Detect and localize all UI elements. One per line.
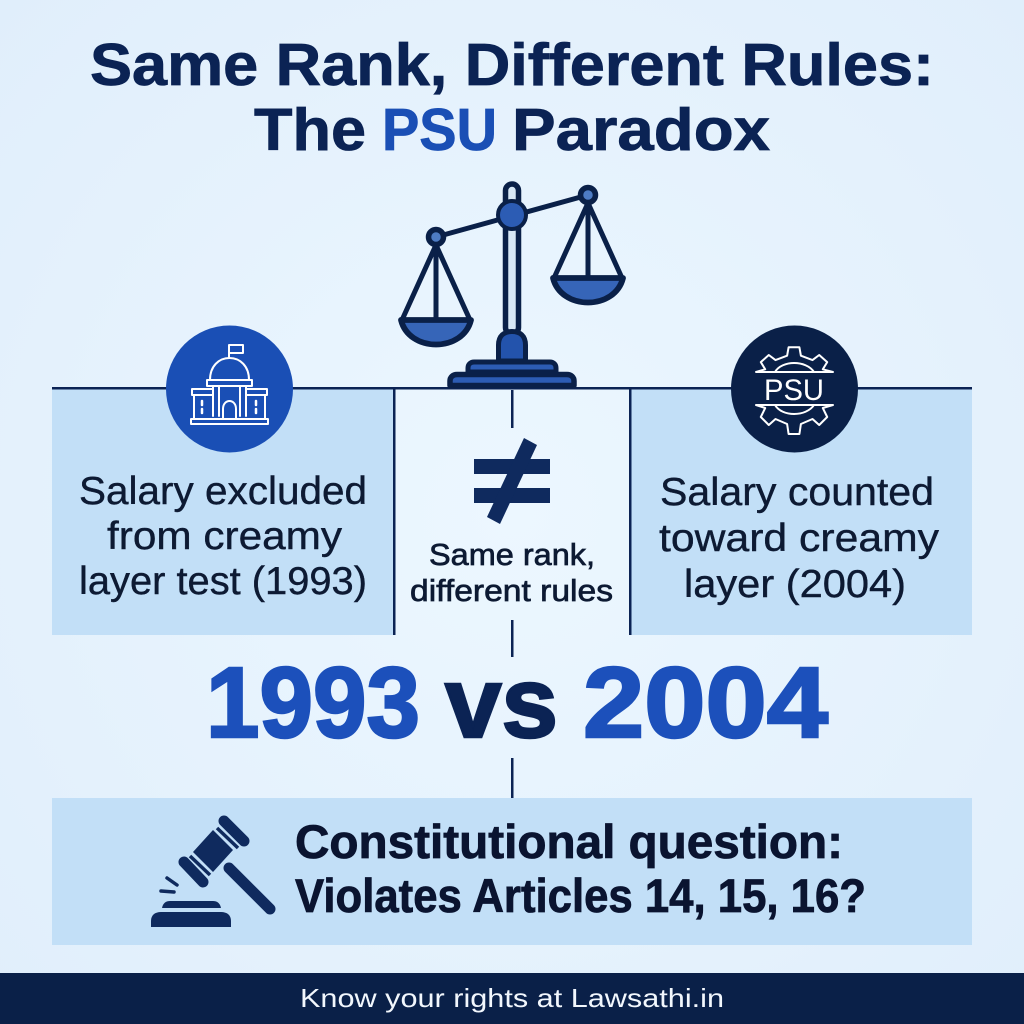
- panel: left salary excluded: [52, 389, 393, 635]
- icon: not equal sign: [474, 438, 550, 524]
- years comparison: [206, 647, 828, 759]
- title: The: [254, 97, 366, 163]
- icon: government building badge: [166, 326, 293, 452]
- years comparison: 1993: [206, 647, 420, 759]
- years comparison: vs: [445, 647, 558, 759]
- panel: constitutional question: [52, 798, 972, 945]
- left panel text: from creamy: [107, 515, 343, 558]
- title: Paradox: [512, 97, 770, 163]
- title: PSU: [382, 97, 497, 163]
- center text: Same rank,: [429, 537, 595, 572]
- center text: [410, 537, 613, 608]
- icon: gavel: [151, 821, 270, 927]
- left panel text: [79, 470, 367, 603]
- question text: Violates Articles 14, 15, 16?: [295, 869, 866, 922]
- question text: Constitutional question:: [295, 815, 843, 868]
- right panel text: layer (2004): [684, 563, 906, 606]
- left panel text: Salary excluded: [79, 470, 367, 513]
- icon: PSU gear badge: [731, 326, 858, 452]
- icon: PSU gear badge: PSU: [764, 374, 824, 407]
- right panel text: Salary counted: [660, 471, 934, 514]
- panel: right salary counted: [631, 389, 972, 635]
- right panel text: toward creamy: [659, 517, 940, 560]
- question text: [295, 815, 866, 922]
- footer bar: [0, 973, 1024, 1024]
- title: Same Rank, Different Rules:: [90, 32, 934, 98]
- title: [90, 32, 934, 163]
- left panel text: layer test (1993): [79, 560, 367, 603]
- center text: different rules: [410, 573, 613, 608]
- years comparison: 2004: [583, 647, 828, 759]
- footer bar: Know your rights at Lawsathi.in: [300, 983, 724, 1013]
- right panel text: [659, 471, 940, 606]
- icon: balance scales: [401, 184, 623, 386]
